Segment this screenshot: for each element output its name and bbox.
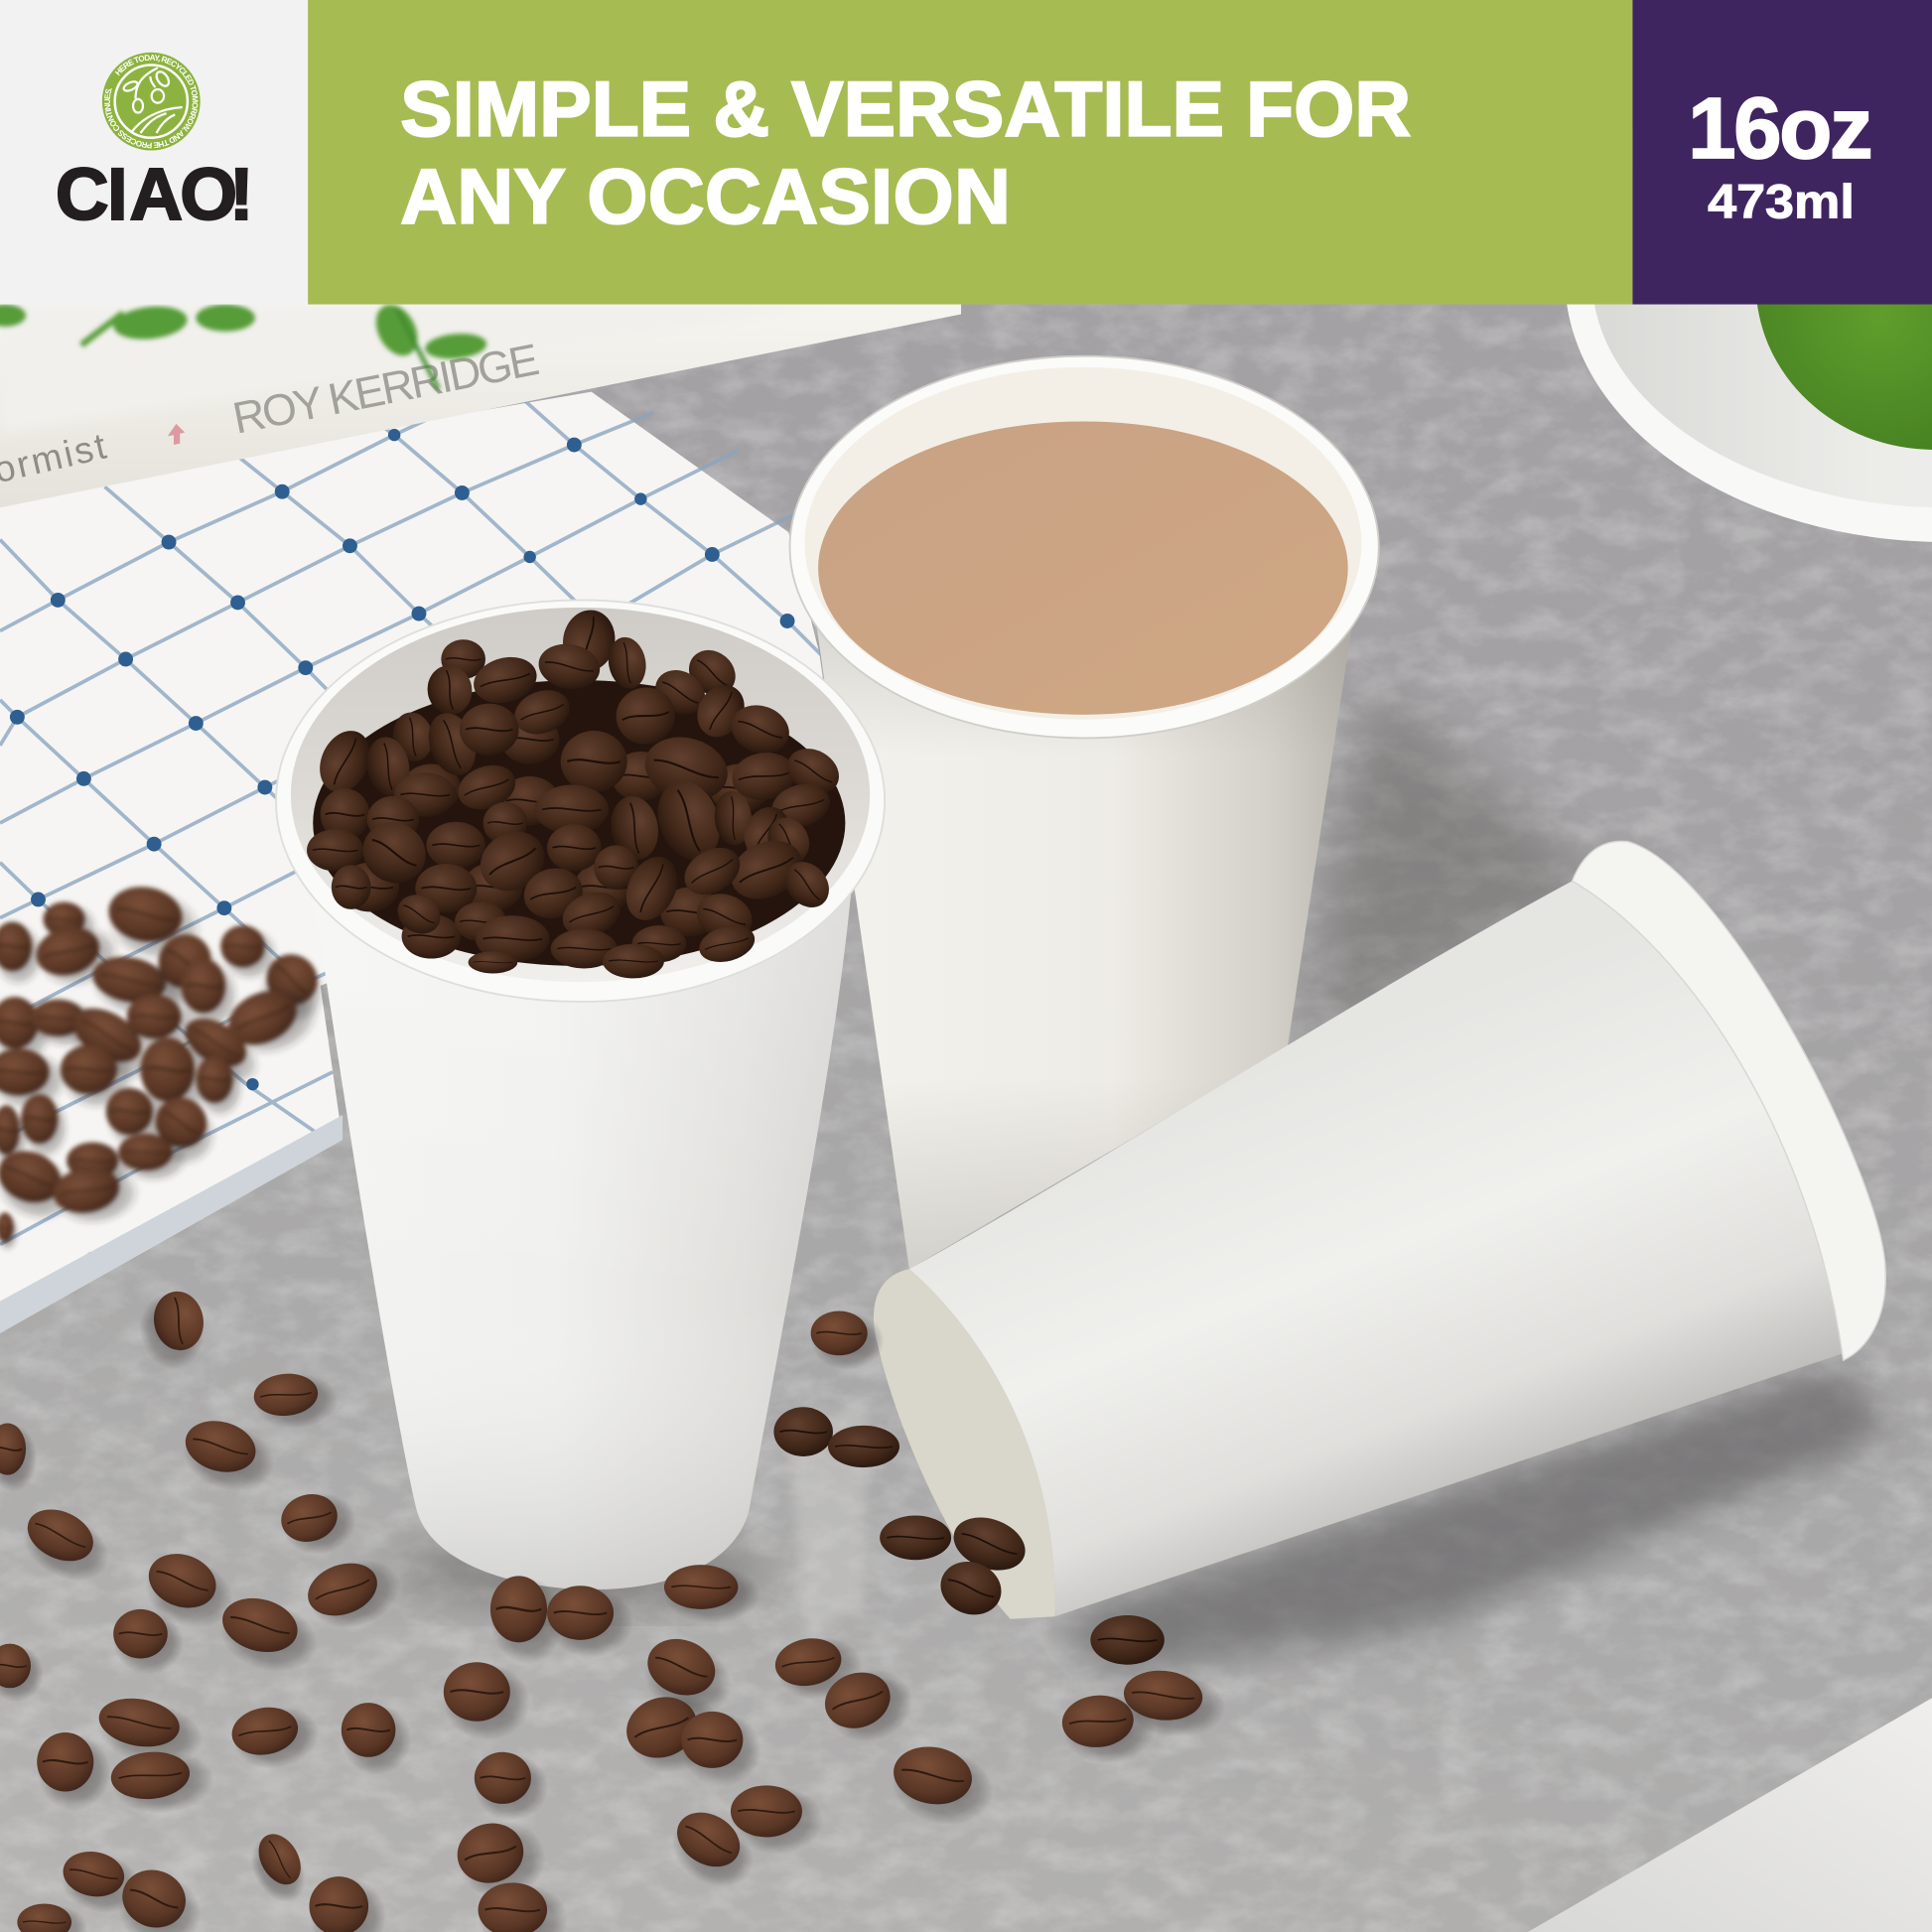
cup: lying cup on its side — [874, 841, 1885, 1619]
coffee beans scattered on table — [0, 1288, 1228, 1932]
panel: logo block — [0, 0, 308, 305]
photo: white paper corner — [1528, 1698, 1932, 1932]
icon: round green recycling seal: HERE TODAY, RECYCLED TOMORROW. AND THE PROCESS CONTINUES. — [104, 55, 199, 149]
heading: ANY OCCASION — [400, 153, 1011, 240]
photo: blurred pile of coffee beans on cloth — [0, 882, 340, 1252]
panel: size badge — [1632, 0, 1932, 305]
coffee beans heaped in cup — [307, 606, 847, 978]
heading: SIMPLE & VERSATILE FOR — [400, 66, 1411, 153]
liquid: milk tea — [818, 421, 1348, 715]
cup: front cup filled with coffee beans — [276, 600, 885, 1589]
panel: title banner — [308, 0, 1632, 305]
photo: cloth with blue check pattern — [0, 382, 838, 1333]
photo: soft shadows under cups — [388, 690, 1891, 1673]
cup: back cup filled with milk tea — [790, 356, 1379, 1269]
photo: book with spine lettering — [0, 305, 961, 507]
photo: plate with lime — [1565, 12, 1932, 542]
photo: book with spine lettering: ROY KERRIDGE — [229, 336, 543, 444]
size in millilitres: 473ml — [1708, 176, 1855, 229]
photo: green leaves — [0, 298, 487, 389]
brand name: CIAO! — [56, 153, 254, 235]
size in ounces: 16oz — [1688, 80, 1872, 177]
